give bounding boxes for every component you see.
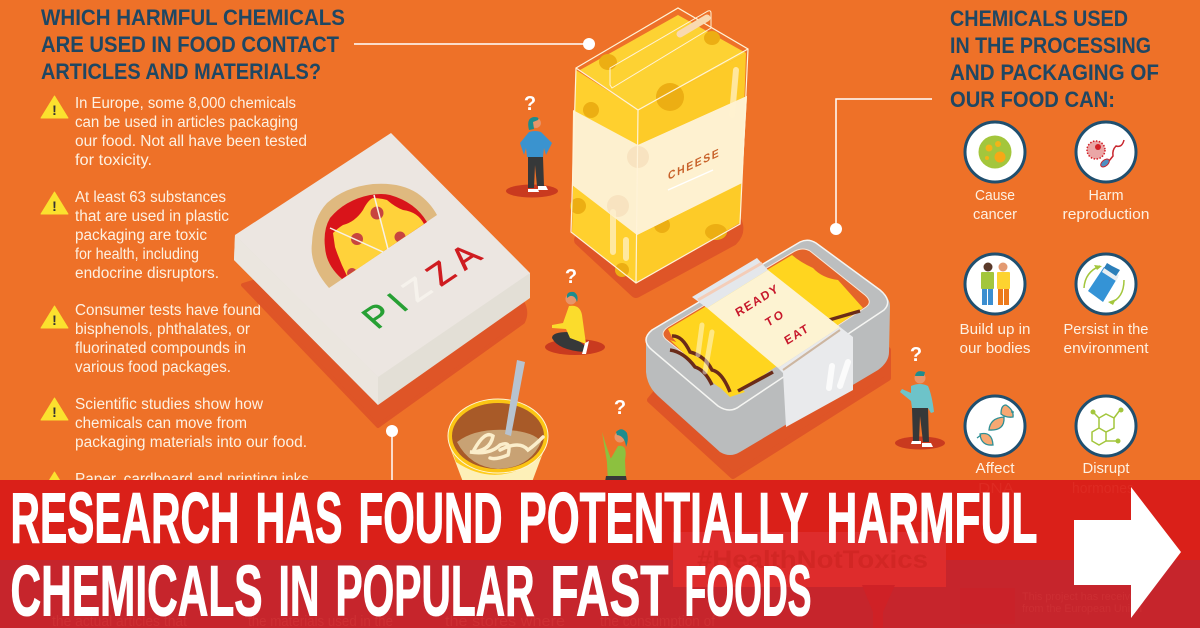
- illustration: pizza box: [234, 133, 530, 426]
- icon: affect DNA: [965, 396, 1025, 477]
- tray label: TO: [763, 307, 786, 330]
- warning 1: our food. Not all have been tested: [75, 133, 307, 150]
- icon: harm reproduction: Harm: [1088, 187, 1124, 204]
- icon: persist in the environment: environment: [1064, 340, 1149, 357]
- warning 4: [41, 396, 307, 451]
- cheese label: CHEESE: [668, 147, 719, 183]
- heading: chemicals used: [950, 6, 1159, 112]
- tray label: READY: [733, 282, 780, 320]
- warning 2: that are used in plastic: [75, 208, 229, 225]
- headline: POTENTIALLY: [518, 480, 808, 558]
- effects panel: [960, 122, 1150, 477]
- warning 2: [41, 189, 229, 282]
- illustration: noodle cup: [448, 360, 548, 482]
- faint background text: hormones: [1072, 480, 1134, 497]
- icon: persist in the environment: [1064, 254, 1149, 357]
- warning 1: can be used in articles packaging: [75, 114, 298, 131]
- faint background text: DNA: [978, 480, 1014, 497]
- warning 2: packaging are toxic: [75, 227, 207, 244]
- connector: heading to cheese carton: [354, 38, 595, 50]
- icon: disrupt hormones: Disrupt: [1082, 460, 1130, 477]
- icon: build up in our bodies: Build up in: [960, 321, 1030, 338]
- icon: cause cancer: [965, 122, 1025, 223]
- warning 4: !: [52, 404, 57, 420]
- faint hashtag box: #HealthNotToxics: [697, 546, 928, 574]
- pizza label: PIZZA: [354, 233, 496, 335]
- icon: harm reproduction: reproduction: [1062, 206, 1150, 223]
- heading: which harmful chemicals: ARTICLES AND MATERIALS?: [41, 59, 321, 84]
- icon: cause cancer: Cause: [975, 187, 1015, 204]
- person: blue figure with question mark: [506, 93, 558, 198]
- heading: chemicals used: AND PACKAGING OF: [950, 60, 1159, 85]
- person: blue figure with question mark: ?: [524, 93, 536, 115]
- warning 3: bisphenols, phthalates, or: [75, 321, 250, 338]
- warning 2: !: [52, 198, 57, 214]
- banner: red headline band: [0, 480, 1200, 628]
- warning 4: Scientific studies show how: [75, 396, 264, 413]
- icon: build up in our bodies: [960, 254, 1030, 357]
- heading: which harmful chemicals: WHICH HARMFUL CHEMICALS: [41, 5, 345, 30]
- person: seated yellow figure with question mark: ?: [565, 266, 577, 288]
- illustration: ready to eat tray: [646, 240, 890, 476]
- connector: tray to right heading: [830, 99, 932, 235]
- icon: affect DNA: Affect: [976, 460, 1015, 477]
- faint background text: This project has received: [1022, 591, 1142, 603]
- lasagna: [668, 255, 863, 397]
- warning 3: various food packages.: [75, 359, 231, 376]
- tray band: [692, 258, 853, 427]
- warning 3: !: [52, 312, 57, 328]
- warning 4: packaging materials into our food.: [75, 434, 307, 451]
- person: seated yellow figure with question mark: [545, 266, 605, 355]
- arrow: [1074, 487, 1181, 618]
- cheese holes: [570, 31, 727, 277]
- heading: chemicals used: IN THE PROCESSING: [950, 33, 1151, 58]
- person: green figure with question mark: [602, 397, 628, 482]
- warning 5: Paper, cardboard and printing inks: [75, 471, 309, 488]
- icon: harm reproduction: [1062, 122, 1150, 223]
- warning 3: fluorinated compounds in: [75, 340, 246, 357]
- warning 2: endocrine disruptors.: [75, 265, 219, 282]
- pizza graphic: [312, 184, 437, 288]
- heading: chemicals used: CHEMICALS USED: [950, 6, 1128, 31]
- icon: disrupt hormones: [1076, 396, 1136, 477]
- heading: which harmful chemicals: ARE USED IN FOOD CONTACT: [41, 32, 340, 57]
- icon: cause cancer: cancer: [973, 206, 1017, 223]
- warning 1: !: [52, 102, 57, 118]
- headline: RESEARCH: [10, 480, 240, 558]
- faint background text: [52, 480, 1142, 628]
- warning 2: for health, including: [75, 246, 199, 263]
- faint hashtag box: [673, 532, 946, 587]
- warning 2: At least 63 substances: [75, 189, 226, 206]
- warning 3: [41, 302, 261, 376]
- person: teal figure with question mark: [895, 344, 945, 450]
- warning 1: for toxicity.: [75, 152, 152, 169]
- warning 1: In Europe, some 8,000 chemicals: [75, 95, 296, 112]
- warning 1: [41, 95, 307, 169]
- text block: chemical warnings list: [41, 95, 309, 494]
- warning 3: Consumer tests have found: [75, 302, 261, 319]
- headline: HAS: [256, 480, 342, 558]
- person: green figure with question mark: ?: [614, 397, 626, 419]
- headline: HARMFUL: [826, 480, 1038, 558]
- heading: which harmful chemicals: [41, 5, 345, 84]
- headline: FOUND: [358, 480, 502, 558]
- illustration: cheese carton: [570, 8, 748, 292]
- connector: noodle cup: [386, 425, 398, 482]
- headline: [10, 480, 1038, 628]
- person: teal figure with question mark: ?: [910, 344, 922, 366]
- faint background text: from the European Union: [1022, 603, 1142, 615]
- icon: build up in our bodies: our bodies: [960, 340, 1030, 357]
- tray label: [733, 282, 811, 348]
- heading: chemicals used: OUR FOOD CAN:: [950, 87, 1115, 112]
- warning 5: [41, 471, 309, 494]
- tray label: EAT: [782, 321, 811, 348]
- warning 4: chemicals can move from: [75, 415, 247, 432]
- icon: persist in the environment: Persist in the: [1064, 321, 1148, 338]
